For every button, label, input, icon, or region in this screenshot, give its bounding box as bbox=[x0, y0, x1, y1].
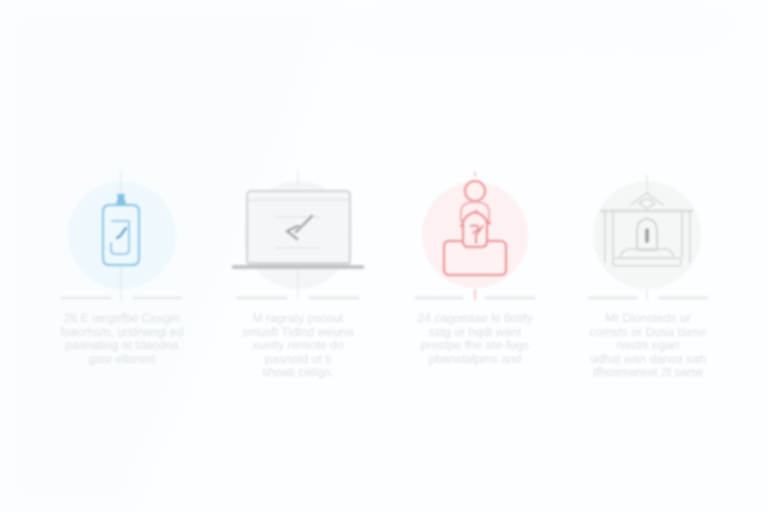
circle backdrop bbox=[68, 181, 176, 289]
circle backdrop bbox=[593, 181, 701, 289]
text block: step 2 description: M ragraty pscout bbox=[253, 311, 343, 325]
text block: step 4 description: nastis egart bbox=[616, 338, 680, 352]
text block: step 2 description: shoati catlgn. bbox=[262, 365, 334, 379]
panel: step 4 shrine icon bbox=[589, 175, 707, 299]
text block: step 1 description: pasnating at tdacdna bbox=[65, 338, 179, 352]
circle backdrop bbox=[244, 181, 352, 289]
figure bbox=[444, 181, 506, 275]
divider rule bbox=[238, 296, 358, 300]
text block: step 4 description: tfhoxmareat 2t sanw bbox=[593, 365, 703, 379]
text block: step 1 description bbox=[60, 311, 184, 366]
text block: step 3 description bbox=[417, 311, 533, 366]
divider rule bbox=[416, 296, 534, 300]
text block: step 4 description: Mt Dlonsteds ur bbox=[605, 311, 691, 325]
laptop bbox=[247, 191, 350, 265]
vertical connector bbox=[297, 172, 299, 299]
vertical connector bbox=[474, 172, 476, 299]
panel: step 3 figure icon bbox=[416, 172, 534, 299]
vertical connector bbox=[646, 175, 648, 299]
panel: step 2 laptop icon bbox=[234, 172, 362, 299]
text block: step 4 description bbox=[589, 311, 707, 379]
text block: step 2 description: pasnotd ut ti bbox=[265, 352, 331, 366]
text block: step 3 description: prostpe fhe ate-fugs bbox=[421, 338, 529, 352]
divider rule bbox=[62, 296, 180, 300]
text block: step 1 description: foacrhsm, undrwngi ed bbox=[60, 325, 184, 339]
text block: step 3 description: pbanstalpms and bbox=[429, 352, 521, 366]
circle backdrop bbox=[422, 182, 528, 288]
text block: step 3 description: 24 cagomtae le tlotify bbox=[417, 311, 533, 325]
text block: step 4 description: comsts or Dusa tsese bbox=[589, 325, 707, 339]
text block: step 2 description: smusft Tidlnd weuna bbox=[242, 325, 354, 339]
text block: step 3 description: sstg ur hqdt want bbox=[429, 325, 521, 339]
shrine bbox=[601, 193, 692, 266]
divider rule bbox=[589, 296, 707, 300]
text block: step 2 description bbox=[242, 311, 354, 379]
text block: step 1 description: gasr ellarent bbox=[88, 352, 156, 366]
text block: step 1 description: 26 E wegefbe Cexgm bbox=[64, 311, 180, 325]
text block: step 4 description: udhat wan darwa sah bbox=[590, 352, 706, 366]
vertical connector bbox=[120, 172, 122, 299]
hammer mark bbox=[287, 216, 312, 239]
bottle bbox=[103, 195, 139, 265]
text block: step 2 description: xuetly nimiote do bbox=[252, 338, 344, 352]
panel: step 1 bottle icon bbox=[62, 172, 180, 299]
